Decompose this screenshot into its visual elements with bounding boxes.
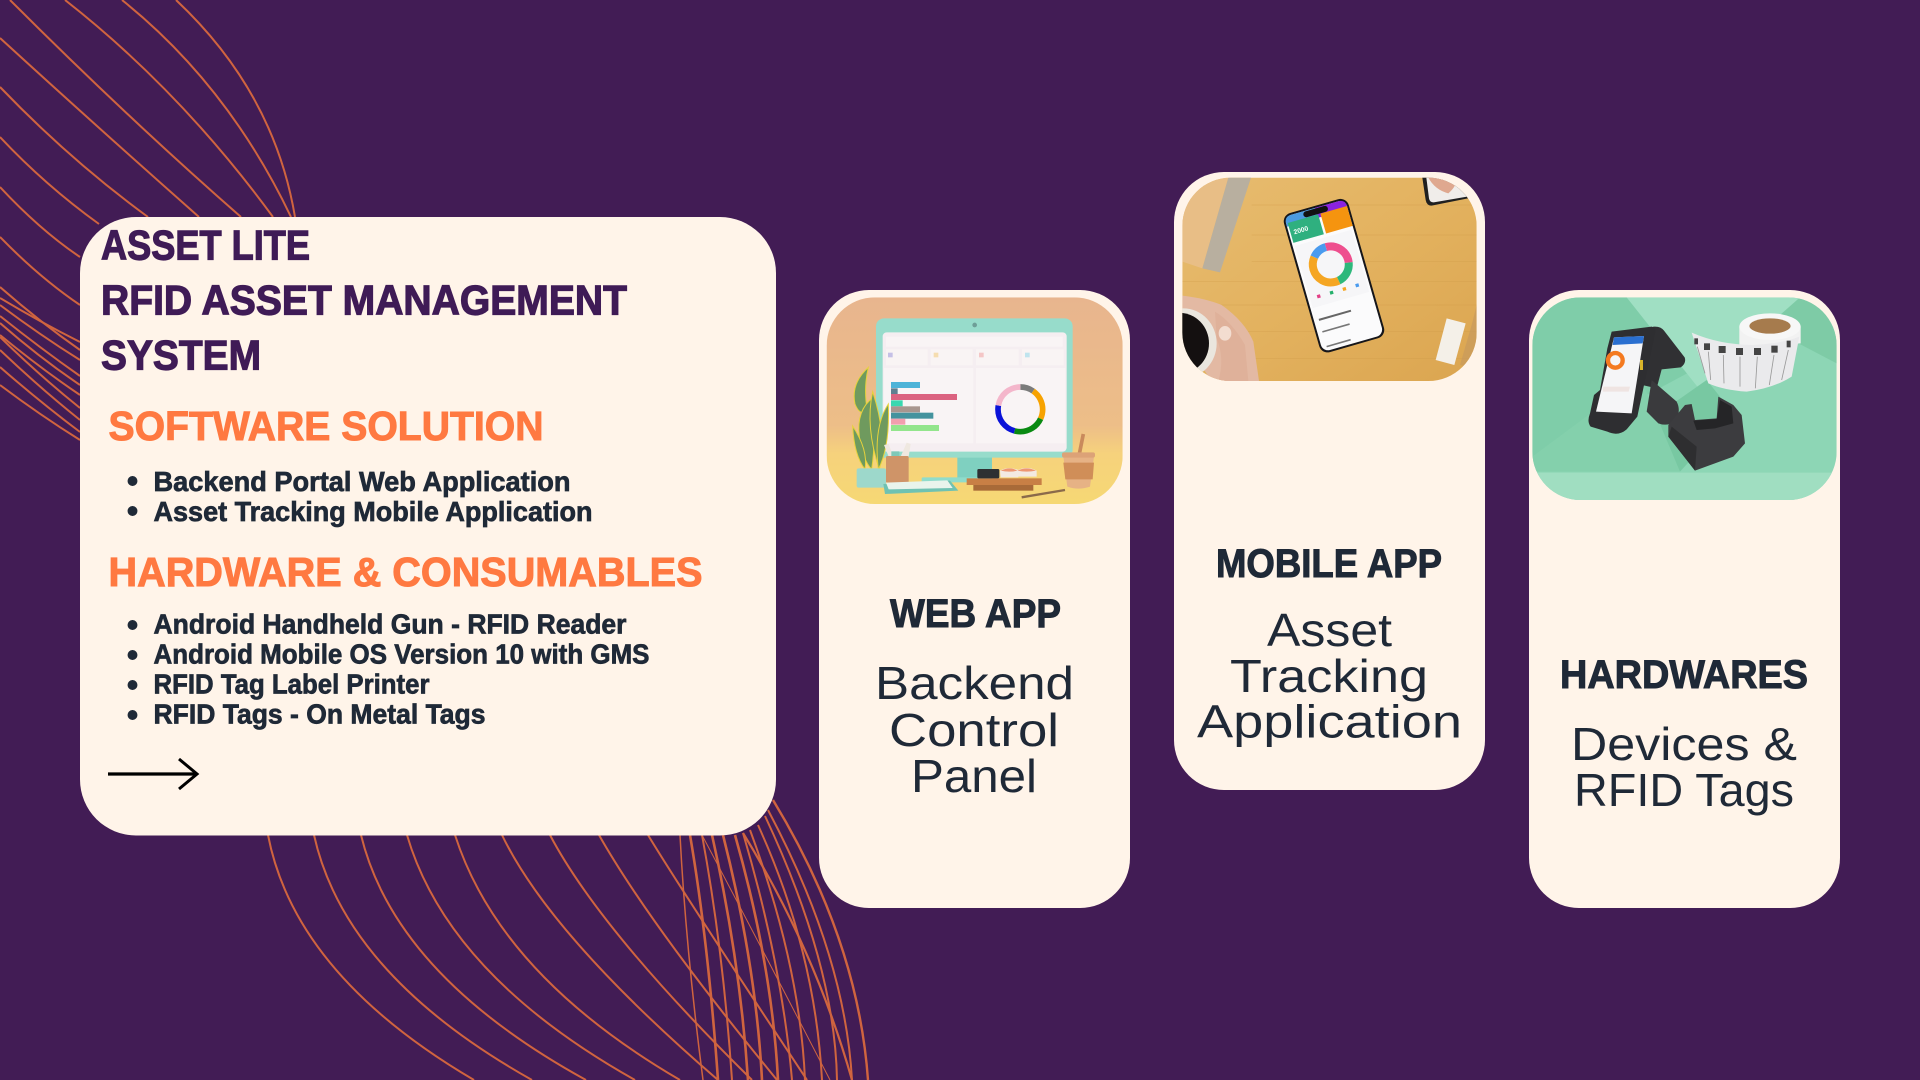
decorative curves: top left [0,0,295,440]
notebook [1182,178,1251,272]
text: asset tracking application [1197,604,1462,748]
text: devices and rfid tags: RFID Tags [1574,764,1794,816]
text: backend control panel: Panel [911,750,1037,802]
panel: mobile app card [1149,172,1485,790]
rfid handheld gun [1588,327,1685,434]
bar chart [891,382,957,431]
heading: software solution: SOFTWARE SOLUTION [108,403,544,449]
list: hardware items: RFID Tag Label Printer [154,668,430,700]
keyboard [883,480,958,494]
phone donut [1309,242,1353,287]
arrow [108,759,197,789]
panel: hardwares card [1529,290,1840,908]
list: software items: Backend Portal Web Application [154,466,570,497]
text: devices and rfid tags: Devices & [1571,718,1797,770]
decorative curves: bottom [268,800,868,1080]
text: backend control panel: Control [889,704,1059,756]
heading: hardware and consumables: HARDWARE & CONSUMABLES [108,549,702,595]
text: asset tracking application: Application [1197,696,1462,748]
text: backend control panel [875,657,1074,802]
eraser [1436,318,1466,365]
text: asset tracking application: Asset [1267,604,1392,656]
tag roll [1692,313,1801,392]
heading: mobile app: MOBILE APP [1216,542,1442,586]
coffee and hand [1182,296,1259,381]
list: hardware items: Android Mobile OS Version 10 with GMS [154,638,650,670]
list: software items: Asset Tracking Mobile Application [154,496,592,527]
phone: 2000 [1293,225,1309,236]
charging cradle [1668,397,1745,471]
metal clips [1460,305,1477,368]
text: backend control panel: Backend [875,657,1074,709]
list: software items [128,466,593,527]
donut chart [998,387,1043,432]
panel: web app card [819,290,1130,908]
title: SYSTEM [101,332,261,378]
list: hardware items: RFID Tags - On Metal Tags [154,698,486,730]
heading: web app: WEB APP [890,592,1061,636]
list: hardware items [128,608,649,730]
tablet corner [1422,178,1468,206]
text: asset tracking application: Tracking [1230,650,1428,702]
sushi board [967,468,1042,491]
plant [853,367,889,469]
phone [1282,197,1386,354]
illustration: desktop monitor dashboard [827,297,1123,504]
illustration: rfid reader, cradle and tag roll [1532,297,1837,500]
text: devices and rfid tags [1571,718,1797,816]
title: RFID ASSET MANAGEMENT [101,276,627,324]
pencil cup [884,443,911,483]
list: hardware items: Android Handheld Gun - RFID Reader [154,608,627,640]
illustration: phone on wooden desk [1149,178,1477,381]
title: ASSET LITE [101,222,310,268]
heading: hardwares: HARDWARES [1560,653,1808,697]
panel: asset lite overview [80,217,776,836]
chopsticks [1022,490,1065,497]
coffee cup [1062,434,1095,489]
title [101,222,627,378]
